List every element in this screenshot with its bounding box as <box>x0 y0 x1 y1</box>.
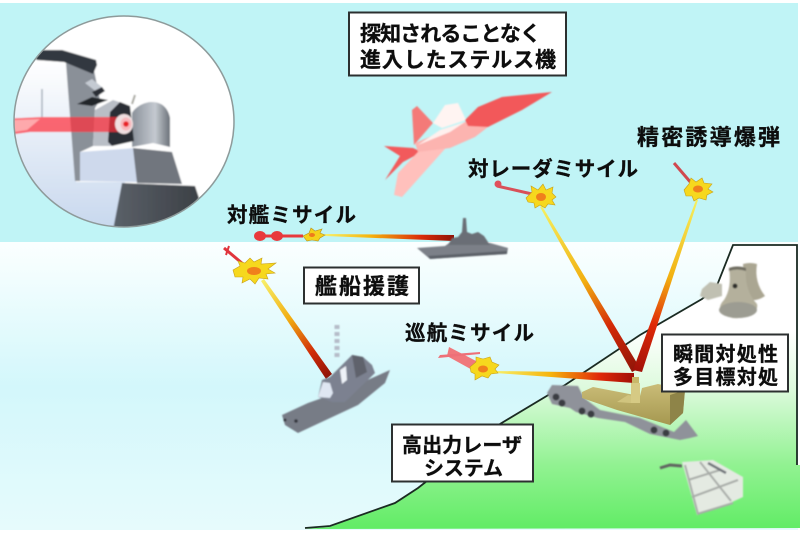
beam: to cruise missile <box>495 371 634 383</box>
label: guided bomb: 精密誘導爆弾 <box>637 125 780 150</box>
distant warship <box>417 218 508 259</box>
label: cruise missile: 巡航ミサイル <box>405 322 534 345</box>
inset: turret mount <box>93 100 125 146</box>
label: ship protection box: 艦船援護 <box>315 274 409 299</box>
label: instant response box <box>662 334 788 392</box>
label: anti-radar missile: 対レーダミサイル <box>468 157 638 181</box>
foreground warship <box>282 325 390 433</box>
anti-ship missile <box>254 228 325 241</box>
ship missile and explosion <box>224 246 276 284</box>
truck chassis and wheels <box>547 385 698 440</box>
background: sea <box>0 242 798 530</box>
beam director <box>631 383 640 403</box>
beam: to guided bomb <box>633 200 698 372</box>
label: high-power laser system box: 高出力レーザ <box>402 434 522 457</box>
laser beams <box>261 200 698 383</box>
label: stealth aircraft box: 探知されることなく <box>360 23 541 46</box>
inset: dark pedestal <box>133 148 182 184</box>
cruise missile and explosion <box>438 347 499 380</box>
inset: dark hull <box>113 183 199 230</box>
inset: light deck block <box>80 148 137 182</box>
beam: to anti-ship missile <box>325 234 454 241</box>
stealth aircraft <box>384 92 552 197</box>
beam: from ship <box>261 279 332 379</box>
inset: circle outline <box>14 16 234 227</box>
label: high-power laser system box <box>392 424 533 482</box>
anti-radar missile and explosion <box>494 180 556 208</box>
label: high-power laser system box: システム <box>424 458 503 480</box>
guided bomb and explosion <box>674 163 713 201</box>
inset: turret dome <box>132 102 170 147</box>
label: stealth aircraft box <box>349 12 566 76</box>
label: stealth aircraft box: 進入したステルス機 <box>360 49 556 72</box>
inset: ship laser turret close-up <box>0 16 234 230</box>
inset: laser aperture <box>115 114 133 134</box>
label: instant response box: 瞬間対処性 <box>673 343 778 366</box>
laser container <box>582 384 685 425</box>
explosion <box>303 228 325 241</box>
nuclear plant cooling towers <box>700 263 765 318</box>
mobile laser truck <box>547 377 698 440</box>
inset: sensor bracket <box>85 78 102 92</box>
ground: hillside with coastline <box>305 245 800 529</box>
beam: to anti-radar missile <box>540 206 640 372</box>
label: anti-ship missile: 対艦ミサイル <box>227 204 356 227</box>
inset: mast line <box>41 89 43 117</box>
label: instant response box: 多目標対処 <box>673 366 778 389</box>
radar array on ground <box>660 460 743 515</box>
inset: roof overhang <box>35 50 97 74</box>
background: sky <box>0 3 798 243</box>
inset: superstructure wall <box>15 85 125 226</box>
inset: grey wall <box>66 63 100 181</box>
label: ship protection box <box>304 268 419 304</box>
inset: red laser beam <box>14 116 119 135</box>
